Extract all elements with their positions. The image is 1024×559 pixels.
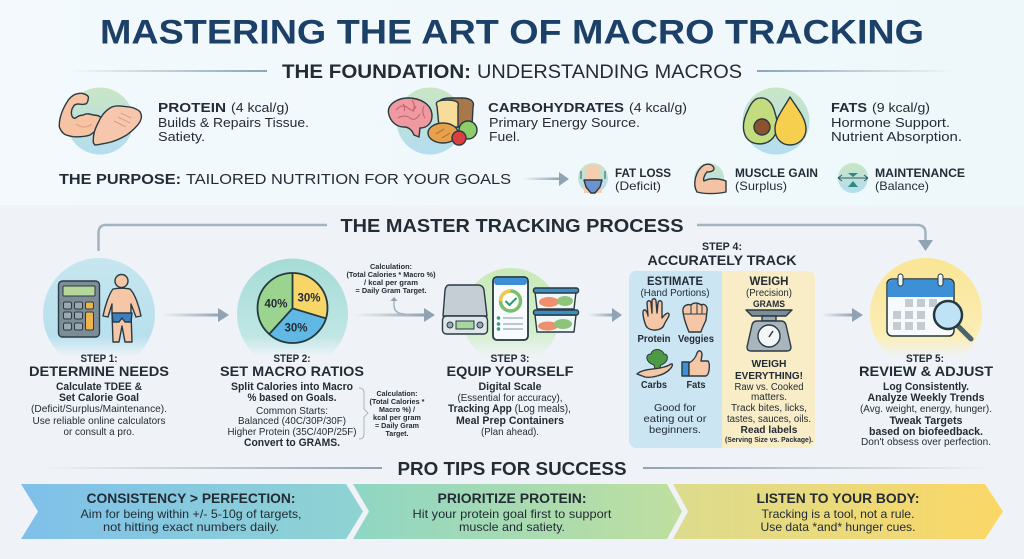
panel: step 4 weigh: GRAMS xyxy=(753,299,785,310)
text: estimate note: eating out or xyxy=(644,413,707,425)
text: protein: PROTEIN xyxy=(158,100,226,115)
text: muscle gain: (Surplus) xyxy=(735,179,787,193)
icon: step 1 calculator and person xyxy=(43,258,155,370)
text: estimate note xyxy=(644,402,707,436)
text: step 2: STEP 2: xyxy=(274,353,310,365)
arrow: process loop left xyxy=(98,225,327,251)
callout: top calculation: / kcal per gram xyxy=(364,278,418,287)
text: weigh everything: Raw vs. Cooked xyxy=(734,382,804,393)
text: protein: Builds & Repairs Tissue. xyxy=(158,116,309,130)
heading: the foundation xyxy=(282,62,742,83)
panel: step 4 estimate: (Hand Portions) xyxy=(640,288,710,299)
panel: tip prioritize protein: Hit your protein goal first to support xyxy=(412,507,612,521)
panel: step 4 estimate xyxy=(629,271,722,448)
arrow: step 2 to 3 xyxy=(355,297,435,322)
text: step 5: Analyze Weekly Trends xyxy=(868,392,984,404)
panel: tip consistency: not hitting exact numbers daily. xyxy=(103,520,279,534)
text: step 1 xyxy=(29,353,169,438)
callout: side calculation: = Daily Gram xyxy=(375,421,419,430)
panel: tip listen to your body: Use data *and* hunger cues. xyxy=(760,520,916,534)
callout: side calculation: kcal per gram xyxy=(373,413,421,422)
text: step 1: Calculate TDEE & xyxy=(56,381,142,393)
text: carbohydrates: Primary Energy Source. xyxy=(489,116,640,130)
panel: step 4 weigh xyxy=(722,271,815,448)
panel: step 4 estimate: ESTIMATE xyxy=(647,276,703,288)
text: step 3: Meal Prep Containers xyxy=(456,415,564,427)
callout: side calculation: (Total Calories * xyxy=(370,397,425,406)
heading: the master tracking process: THE MASTER TRACKING PROCESS xyxy=(340,215,684,236)
callout: top calculation xyxy=(346,262,436,295)
text: carbohydrates xyxy=(488,100,687,144)
text: weigh everything xyxy=(725,358,813,444)
text: step 3: (Essential for accuracy), xyxy=(458,392,562,404)
text: muscle gain: MUSCLE GAIN xyxy=(735,166,818,180)
icon: maintenance balance xyxy=(838,163,868,193)
text: carbohydrates: CARBOHYDRATES xyxy=(488,100,624,115)
panel: tip prioritize protein: PRIORITIZE PROTEIN: xyxy=(438,491,586,506)
text: step 5: Log Consistently. xyxy=(883,381,969,393)
text: weigh everything: Track bites, licks, xyxy=(731,403,807,414)
text: estimate note: beginners. xyxy=(649,424,701,436)
icon: protein muscle and chicken xyxy=(59,88,142,154)
panel: tip consistency: Aim for being within +/- 5-10g of targets, xyxy=(80,507,302,521)
text: step 2: Balanced (40C/30P/30F) xyxy=(238,415,346,427)
text: step 2: Split Calories into Macro xyxy=(231,381,353,393)
text: step 5: REVIEW & ADJUST xyxy=(859,363,993,379)
chart: step 2 macro pie xyxy=(237,258,348,370)
text: fats: Hormone Support. xyxy=(831,116,950,130)
text: step 3: STEP 3: xyxy=(490,353,530,365)
text: step 5: (Avg. weight, energy, hunger). xyxy=(860,404,992,415)
text: fats xyxy=(831,100,962,144)
heading: the purpose: THE PURPOSE: xyxy=(59,171,181,188)
icon: fats avocado and oil drop xyxy=(742,88,810,154)
text: fat loss: FAT LOSS xyxy=(615,166,671,180)
heading: pro tips for success: PRO TIPS FOR SUCCESS xyxy=(398,458,626,479)
callout: top calculation: Calculation: xyxy=(370,262,412,271)
text: step 2: Convert to GRAMS. xyxy=(244,437,340,449)
arrow: step 3 to 4 xyxy=(588,308,622,322)
text: step 1: Use reliable online calculators xyxy=(32,415,166,427)
text: protein xyxy=(158,100,309,144)
arrow: purpose to goals xyxy=(522,172,569,186)
label: veggies: Veggies xyxy=(678,334,714,345)
text: weigh everything: tastes, sauces, oils. xyxy=(727,414,811,425)
label: fats: Fats xyxy=(686,380,706,391)
callout: side calculation: Calculation: xyxy=(376,389,418,398)
text: step 1: DETERMINE NEEDS xyxy=(29,363,169,379)
panel: tip consistency: CONSISTENCY > PERFECTION: xyxy=(86,491,296,506)
callout: side calculation: Macro %) / xyxy=(379,405,416,414)
icon: fat loss waist xyxy=(578,163,608,193)
text: step 3: Digital Scale xyxy=(478,381,542,393)
panel: tip listen to your body: Tracking is a tool, not a rule. xyxy=(762,507,914,521)
callout: side calculation: Target. xyxy=(386,429,408,438)
panel: foundation background xyxy=(0,0,1024,205)
title: MASTERING THE ART OF MACRO TRACKING xyxy=(100,14,924,52)
panel: step 4 weigh: WEIGH xyxy=(750,276,788,288)
heading: the foundation: UNDERSTANDING MACROS xyxy=(477,62,742,83)
heading: the foundation: THE FOUNDATION: xyxy=(282,62,471,83)
arrow: step 1 to 2 xyxy=(162,308,229,322)
text: step 5: STEP 5: xyxy=(906,353,944,365)
text: step 1: or consult a pro. xyxy=(64,426,134,438)
icon: carbohydrates brain bread fruit xyxy=(388,88,477,154)
icon: kitchen scale xyxy=(746,310,792,351)
text: maintenance: (Balance) xyxy=(875,179,929,193)
text: step 2: Higher Protein (35C/40P/25F) xyxy=(228,426,356,438)
callout: side calculation xyxy=(370,389,425,438)
arrow: process loop right xyxy=(697,225,933,251)
text: step 1: STEP 1: xyxy=(80,353,118,365)
text: step 1: (Deficit/Surplus/Maintenance). xyxy=(31,403,167,415)
text: step 2: SET MACRO RATIOS xyxy=(220,363,364,379)
text: maintenance: MAINTENANCE xyxy=(875,166,965,180)
text: step 5: based on biofeedback. xyxy=(869,426,983,438)
text: step 2 xyxy=(220,353,364,449)
panel: process background xyxy=(0,205,1024,559)
heading: step 4: ACCURATELY TRACK xyxy=(648,252,796,268)
text: step 3 xyxy=(446,353,574,438)
chart: step 2 macro pie: 30% xyxy=(297,292,321,304)
panel: tip listen to your body: LISTEN TO YOUR BODY: xyxy=(756,491,920,506)
text: protein: (4 kcal/g) xyxy=(231,100,289,115)
text: step 5 xyxy=(859,353,993,448)
label: carbs: Carbs xyxy=(641,380,667,391)
panel: tip prioritize protein: muscle and satiety. xyxy=(459,520,565,534)
text: weigh everything: (Serving Size vs. Package). xyxy=(725,435,813,444)
text: fat loss xyxy=(615,166,671,193)
text: muscle gain xyxy=(735,166,818,193)
text: fats: Nutrient Absorption. xyxy=(831,130,962,144)
text: protein: Satiety. xyxy=(158,130,205,144)
label: protein: Protein xyxy=(638,334,670,345)
heading: step 4: STEP 4: xyxy=(702,241,742,253)
icon: fist xyxy=(683,303,707,332)
icon: thumbs up xyxy=(682,351,709,376)
panel: tip listen to your body xyxy=(673,484,1003,539)
panel: tip consistency xyxy=(21,484,363,539)
text: fats: FATS xyxy=(831,100,867,115)
text: fats: (9 kcal/g) xyxy=(872,100,930,115)
callout: top calculation: = Daily Gram Target. xyxy=(356,286,426,295)
callout: side brace xyxy=(359,388,368,439)
text: step 1: Set Calorie Goal xyxy=(59,392,139,404)
text: step 2: Common Starts: xyxy=(256,405,328,417)
text: step 3: EQUIP YOURSELF xyxy=(446,363,574,379)
panel: tip prioritize protein xyxy=(353,484,682,539)
text: carbohydrates: Fuel. xyxy=(489,130,520,144)
text: step 2: % based on Goals. xyxy=(248,392,336,404)
text: step 3: Tracking App (Log meals), xyxy=(448,403,571,415)
text: step 5: Don't obsess over perfection. xyxy=(861,437,991,448)
arrow: step 4 to 5 xyxy=(822,308,863,322)
text: weigh everything: matters. xyxy=(751,392,787,403)
icon: hand with broccoli xyxy=(637,350,672,377)
icon: open hand xyxy=(643,299,669,330)
text: step 5: Tweak Targets xyxy=(890,415,962,427)
text: weigh everything: Read labels xyxy=(740,424,798,436)
text: carbohydrates: (4 kcal/g) xyxy=(629,100,687,115)
text: maintenance xyxy=(875,166,965,193)
callout: top calculation: (Total Calories * Macro %) xyxy=(346,270,436,279)
chart: step 2 macro pie: 30% xyxy=(284,322,308,334)
icon: step 5 calendar and magnifier xyxy=(870,258,982,370)
panel: step 4 weigh: (Precision) xyxy=(746,288,792,299)
text: weigh everything: EVERYTHING! xyxy=(735,370,803,382)
heading: the purpose xyxy=(59,171,511,188)
text: fat loss: (Deficit) xyxy=(615,179,661,193)
heading: step 4 xyxy=(648,241,796,268)
text: estimate note: Good for xyxy=(654,402,697,414)
icon: muscle gain xyxy=(694,163,726,194)
text: step 3: (Plan ahead). xyxy=(481,426,539,438)
heading: the purpose: TAILORED NUTRITION FOR YOUR GOALS xyxy=(186,171,511,188)
chart: step 2 macro pie: 40% xyxy=(264,298,288,310)
icon: step 3 scale, phone, containers xyxy=(442,268,578,365)
text: weigh everything: WEIGH xyxy=(752,358,786,370)
